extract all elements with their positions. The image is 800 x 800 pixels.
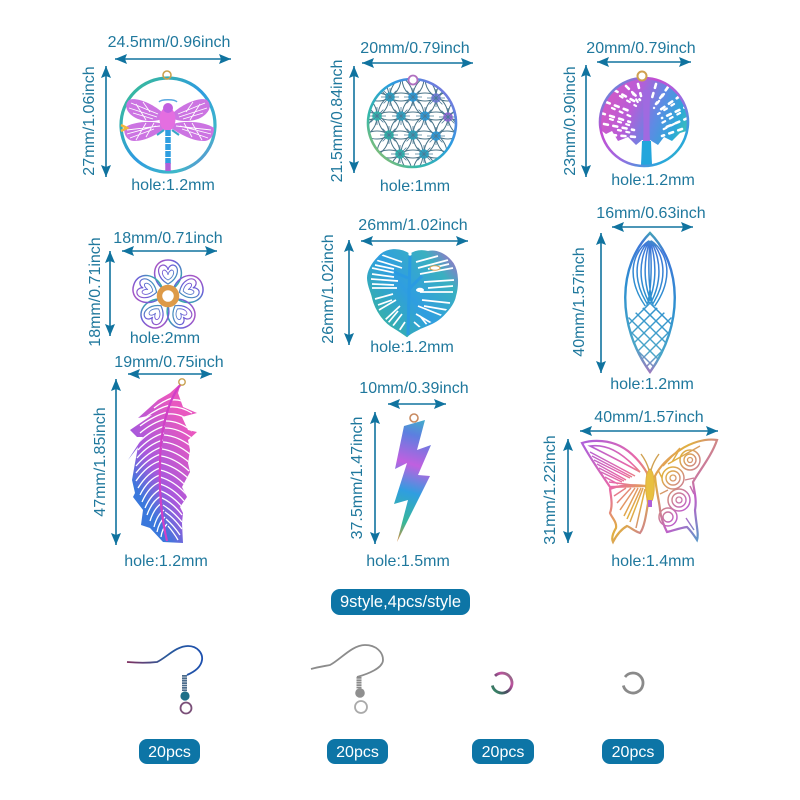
width label: 40mm/1.57inch <box>594 409 704 426</box>
panel: lightning bolt pendant <box>349 380 469 570</box>
width arrow <box>128 373 212 375</box>
height arrow <box>374 412 376 544</box>
height label: 27mm/1.06inch <box>81 66 98 176</box>
height label: 26mm/1.02inch <box>320 234 337 344</box>
icon: tree of life charm <box>598 72 690 166</box>
width arrow <box>361 240 468 242</box>
width arrow <box>597 61 691 63</box>
hole label: hole:1.4mm <box>611 553 695 570</box>
width label: 16mm/0.63inch <box>596 205 706 222</box>
badge: styles count <box>331 589 470 615</box>
height arrow <box>567 439 569 543</box>
height label: 37.5mm/1.47inch <box>349 417 366 539</box>
badge: styles count: 9style,4pcs/style <box>340 593 461 611</box>
badge: rainbow ring count <box>472 739 534 764</box>
width label: 26mm/1.02inch <box>358 217 468 234</box>
icon: silver ear hook <box>311 645 383 713</box>
badge: silver ring count: 20pcs <box>612 744 654 761</box>
icon: dragonfly charm <box>121 71 215 172</box>
icon: butterfly charm <box>582 440 717 542</box>
hole label: hole:2mm <box>130 330 200 347</box>
panel: monstera leaf pendant <box>320 217 468 356</box>
width label: 10mm/0.39inch <box>359 380 469 397</box>
width arrow <box>362 62 473 64</box>
badge: rainbow hook count: 20pcs <box>148 744 191 761</box>
badge: silver hook count <box>327 739 388 764</box>
panel: flower of life pendant <box>330 42 473 191</box>
hole label: hole:1mm <box>380 178 450 195</box>
width label: 20mm/0.79inch <box>360 40 470 57</box>
hole label: hole:1.2mm <box>370 339 454 356</box>
icon: feather charm <box>125 379 200 545</box>
width label: 24.5mm/0.96inch <box>108 34 230 51</box>
width label: 20mm/0.79inch <box>586 40 696 57</box>
height arrow <box>353 66 355 173</box>
height arrow <box>109 251 111 336</box>
icon: flower charm <box>130 260 206 333</box>
badge: silver hook count: 20pcs <box>336 744 379 761</box>
panel: flower pendant <box>87 230 223 347</box>
height label: 21.5mm/0.84inch <box>329 60 346 182</box>
width label: 18mm/0.71inch <box>113 230 223 247</box>
height label: 18mm/0.71inch <box>87 237 104 347</box>
height arrow <box>105 66 107 177</box>
hole label: hole:1.2mm <box>610 376 694 393</box>
height arrow <box>348 240 350 345</box>
width arrow <box>388 403 446 405</box>
height arrow <box>600 233 602 373</box>
badge: rainbow hook count <box>139 739 200 764</box>
icon: rainbow jump ring <box>492 673 512 693</box>
panel: feather pendant <box>92 354 224 570</box>
width arrow <box>580 430 718 432</box>
panel: tree of life pendant <box>562 40 696 189</box>
icon: rainbow ear hook <box>127 646 202 714</box>
panel: butterfly pendant <box>542 409 718 570</box>
width arrow <box>115 58 231 60</box>
height arrow <box>115 379 117 545</box>
hole label: hole:1.2mm <box>124 553 208 570</box>
icon: lightning bolt charm <box>394 414 431 542</box>
panel: navette pendant <box>571 205 706 397</box>
height label: 40mm/1.57inch <box>571 247 588 357</box>
width arrow <box>612 226 693 228</box>
hole label: hole:1.2mm <box>131 177 215 194</box>
icon: navette lattice charm <box>624 231 676 374</box>
width arrow <box>122 250 217 252</box>
height label: 31mm/1.22inch <box>542 435 559 545</box>
width label: 19mm/0.75inch <box>114 354 224 371</box>
height arrow <box>585 65 587 177</box>
badge: silver ring count <box>602 739 664 764</box>
height label: 47mm/1.85inch <box>92 407 109 517</box>
panel: dragonfly pendant <box>81 34 231 194</box>
hole label: hole:1.5mm <box>366 553 450 570</box>
height label: 23mm/0.90inch <box>562 66 579 176</box>
badge: rainbow ring count: 20pcs <box>482 744 524 761</box>
icon: flower of life charm <box>366 74 458 168</box>
icon: silver jump ring <box>623 673 643 693</box>
icon: monstera leaf charm <box>367 249 458 338</box>
hole label: hole:1.2mm <box>611 172 695 189</box>
